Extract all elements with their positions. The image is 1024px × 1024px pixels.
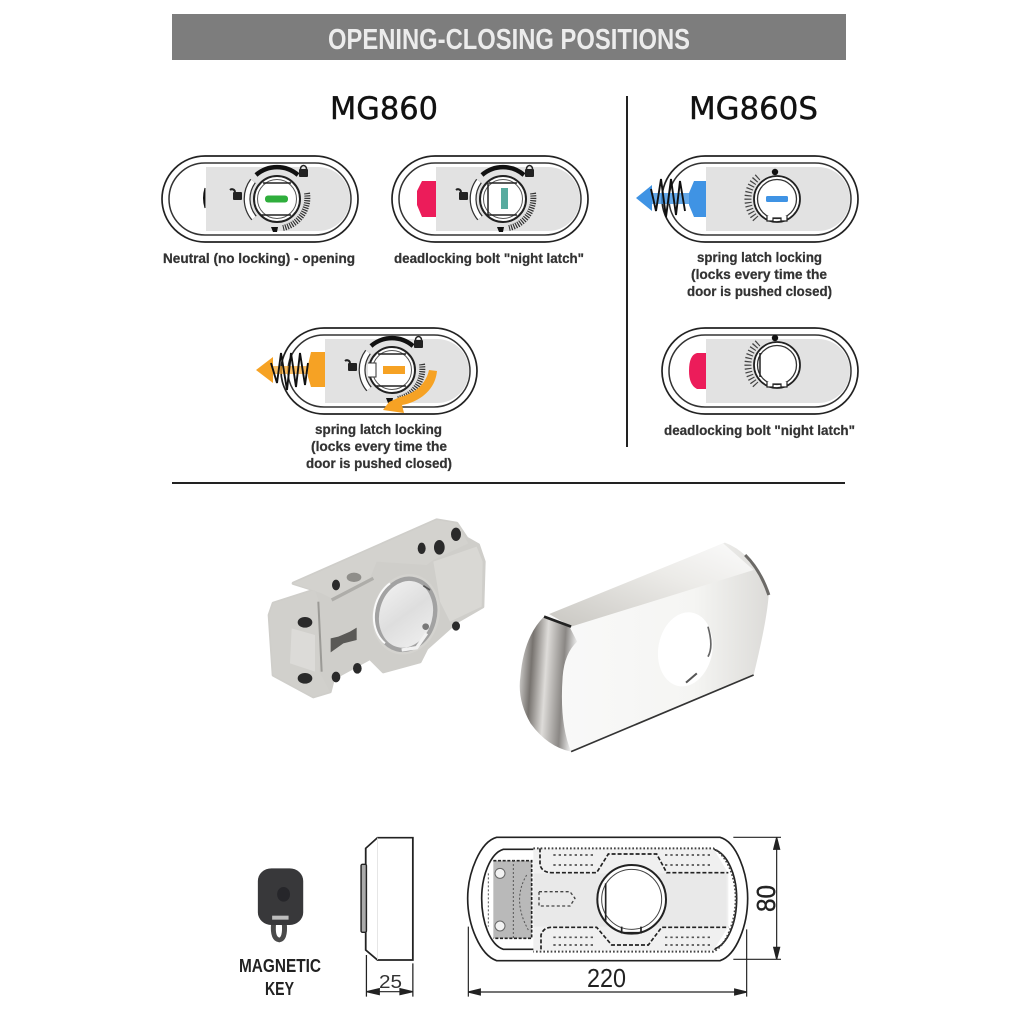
- caption: spring latch MG860S: (locks every time the: [691, 266, 827, 282]
- title banner: [172, 14, 846, 60]
- caption: spring latch MG860S: door is pushed closed): [687, 283, 832, 299]
- caption: spring latch MG860S: [687, 249, 832, 299]
- label: magnetic key: KEY: [265, 979, 294, 999]
- product: lock body: [269, 520, 484, 697]
- label: magnetic key: MAGNETIC: [239, 956, 321, 976]
- product: cover plate: [520, 543, 769, 752]
- drawing: side view: [361, 838, 413, 997]
- dimension: width: [468, 927, 747, 997]
- caption: spring latch MG860S: spring latch locking: [697, 249, 822, 265]
- caption: spring latch MG860: door is pushed closed): [306, 455, 452, 471]
- dimension value: 25: 25: [379, 972, 402, 992]
- arrow: turning direction: [383, 370, 437, 413]
- diagram: MG860 deadlocking bolt: [392, 156, 588, 242]
- caption: neutral: Neutral (no locking) - opening: [163, 250, 355, 266]
- heading: MG860: MG860: [330, 91, 438, 127]
- label: magnetic key: [239, 956, 321, 999]
- caption: spring latch MG860: [306, 421, 452, 471]
- caption: deadlocking bolt MG860: deadlocking bolt "night latch": [394, 250, 584, 266]
- caption: spring latch MG860: (locks every time the: [311, 438, 447, 454]
- diagram: MG860 neutral position: [162, 156, 358, 242]
- caption: spring latch MG860: spring latch locking: [315, 421, 442, 437]
- diagram: MG860 spring latch: [256, 328, 477, 414]
- diagram: MG860S spring latch: [636, 156, 858, 242]
- heading: MG860S: MG860S: [689, 91, 818, 127]
- icon: magnetic key: [258, 868, 303, 940]
- dimension: height: [733, 837, 781, 959]
- diagram: MG860S deadlocking bolt: [662, 328, 858, 414]
- title banner: OPENING-CLOSING POSITIONS: [328, 24, 690, 56]
- drawing: front view: [468, 837, 781, 997]
- dimension value: 80: 80: [751, 885, 781, 912]
- dimension: depth: [366, 955, 413, 997]
- dimension value: 220: 220: [587, 963, 626, 993]
- caption: deadlocking bolt MG860S: deadlocking bolt "night latch": [664, 422, 855, 438]
